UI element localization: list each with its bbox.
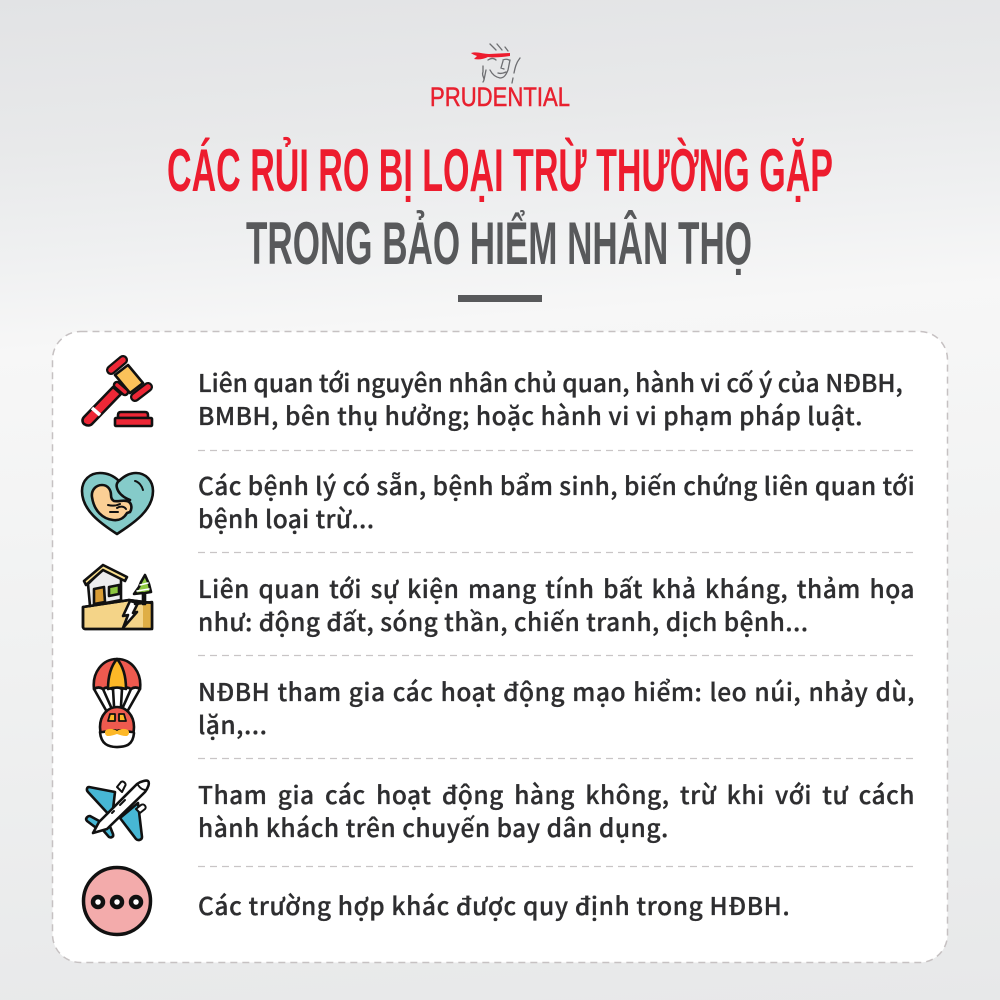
- item 1 text: Liên quan tới nguyên nhân chủ quan, hành vi cố ý của NĐBH,: [198, 365, 903, 400]
- item 3 text: [198, 571, 915, 639]
- item 4 text: lặn,...: [198, 707, 267, 742]
- item 3 text: Liên quan tới sự kiện mang tính bất khả kháng, thảm họa: [198, 571, 915, 606]
- item 5 text: hành khách trên chuyến bay dân dụng.: [198, 810, 669, 845]
- icon: house on earthquake ground: [83, 565, 152, 629]
- title underline: [458, 295, 542, 302]
- icon: fetus in heart: [82, 473, 153, 534]
- item 1 text: [198, 365, 903, 433]
- item 6 text: Các trường hợp khác được quy định trong HĐBH.: [198, 888, 790, 923]
- logo: Prudential: PRUDENTIAL: [430, 82, 570, 112]
- item 2 text: [198, 468, 915, 536]
- icon: gavel: [82, 360, 152, 426]
- item 4 text: NĐBH tham gia các hoạt động mạo hiểm: leo núi, nhảy dù,: [198, 674, 915, 709]
- item 2 text: Các bệnh lý có sẵn, bệnh bẩm sinh, biến chứng liên quan tới: [198, 468, 915, 503]
- item 5 text: [198, 777, 915, 845]
- icon: airplane: [86, 781, 149, 840]
- item 4 text: [198, 674, 915, 742]
- item 5 text: Tham gia các hoạt động hàng không, trừ khi với tư cách: [198, 777, 915, 812]
- item 3 text: như: động đất, sóng thần, chiến tranh, dịch bệnh...: [198, 604, 809, 639]
- icon: parachute: [94, 659, 140, 747]
- item 1 text: BMBH, bên thụ hưởng; hoặc hành vi vi phạm pháp luật.: [198, 398, 863, 433]
- icon: three dots circle: [84, 868, 150, 934]
- logo: Prudential: [430, 44, 570, 112]
- item 2 text: bệnh loại trừ...: [198, 501, 374, 536]
